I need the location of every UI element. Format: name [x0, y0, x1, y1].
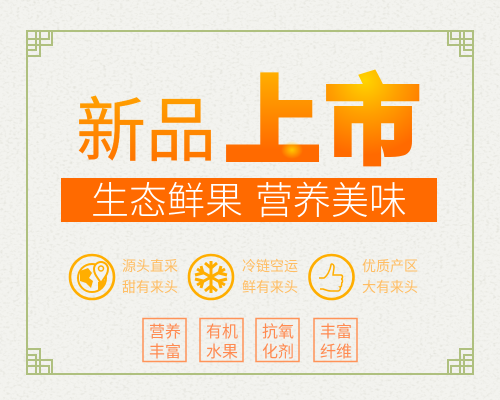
tag: nutrition: [143, 318, 186, 362]
tag: nutrition: 丰富: [149, 343, 181, 361]
feature: cold chain: [189, 255, 298, 299]
feature text: 甜有来头: [122, 279, 178, 295]
tag: organic: [200, 318, 243, 362]
tag: no antioxidant chemicals: 抗氧: [262, 323, 294, 341]
feature text: 优质产区: [362, 258, 418, 274]
title glow highlight: [281, 141, 303, 159]
tag: fiber: 纤维: [320, 343, 352, 361]
feature text: [242, 258, 298, 295]
tag: no antioxidant chemicals: [256, 318, 299, 362]
feature: source: [70, 255, 178, 299]
feature text: 鲜有来头: [242, 279, 298, 295]
title: bold character shi: 市: [325, 70, 420, 176]
feature text: [362, 258, 418, 295]
title: [76, 70, 420, 176]
tag: organic: 有机: [206, 323, 238, 341]
icon: globe with location pin: [70, 255, 114, 299]
feature text: 大有来头: [362, 279, 418, 295]
feature: origin: [310, 255, 418, 299]
tags: [143, 318, 357, 362]
tag: fiber: 丰富: [320, 323, 352, 341]
subtitle text left: 生态鲜果: [91, 181, 243, 223]
tag: nutrition: 营养: [149, 323, 181, 341]
tag: organic: 水果: [206, 343, 238, 361]
feature text: [122, 258, 178, 295]
decorative green frame: [27, 31, 473, 374]
icon: snowflake: [189, 255, 233, 299]
feature text: 源头直采: [122, 258, 178, 274]
title: bold character shang: 上: [225, 70, 320, 176]
tag: no antioxidant chemicals: 化剂: [262, 343, 294, 361]
feature text: 冷链空运: [242, 258, 298, 274]
subtitle text right: 营养美味: [255, 181, 407, 223]
icon: thumbs up: [310, 255, 354, 299]
title: thin characters: 新品: [76, 92, 216, 170]
subtitle banner: [61, 178, 437, 223]
tag: fiber: [314, 318, 357, 362]
